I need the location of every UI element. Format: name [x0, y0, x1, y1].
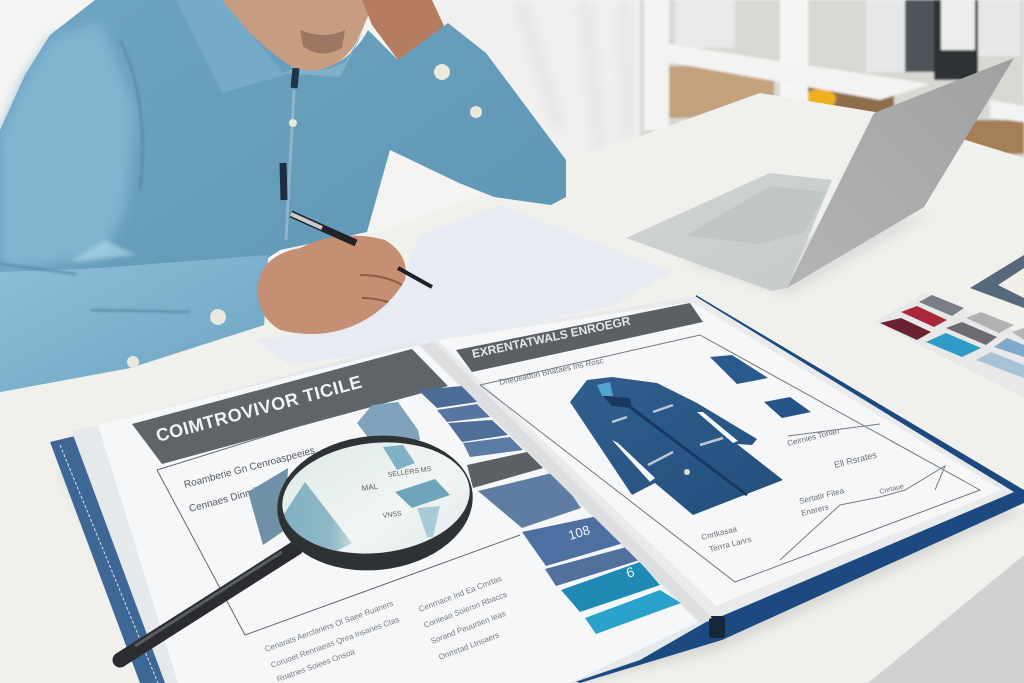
shirt body [0, 0, 566, 392]
laptop shadow [680, 212, 935, 295]
left page heading band [132, 349, 448, 464]
book clip at spine [709, 616, 725, 638]
face and neck [222, 0, 375, 72]
left page heading band: COIMTROVIVOR TICILE [154, 372, 364, 446]
right page annotations: Cnrtaue [879, 483, 905, 496]
book shadow [60, 370, 1024, 683]
right page annotations: Cnrtkasaa [700, 524, 738, 542]
magnifying glass [120, 426, 479, 660]
loose paper on desk [255, 205, 672, 365]
hand at head [362, 0, 445, 60]
sub-heading text [183, 445, 316, 515]
pen [291, 214, 432, 287]
left page body text: Coruoet Rennaeas Qrea Insanes Ctas [270, 615, 401, 670]
left page [72, 340, 706, 683]
corner of second laptop [868, 555, 1024, 683]
left page colour bars: 6 [624, 563, 637, 581]
open spec book [50, 295, 1024, 683]
right page annotations: Terrra Lanrs [708, 535, 752, 554]
blue book cover [50, 295, 1024, 683]
left page garment thumbnails [248, 402, 420, 545]
colour swatch card [875, 255, 1024, 398]
right page heading band: EXRENTATWALS ENROEGR [471, 314, 632, 361]
left page body text [264, 574, 508, 683]
shoulder and upper arm highlight [0, 22, 135, 270]
lens glass [277, 433, 475, 563]
magnified content: SELLERS MS [387, 466, 432, 479]
left page body text: Sorand Peuurtien Ieas [429, 609, 507, 646]
man in denim shirt [0, 0, 566, 392]
small garment swatches [710, 355, 768, 384]
shirt buttons [127, 64, 482, 368]
left page body text: Onmrtad Ltnsaers [437, 631, 500, 662]
magnified content [280, 445, 450, 558]
handle [120, 548, 296, 660]
denim jacket illustration [570, 377, 783, 515]
right page annotations: Dneueatfon Bnataes Ins Rosc [499, 356, 604, 387]
right page annotations: Sertatir Fitea [798, 486, 845, 506]
shelving unit [640, 0, 1024, 160]
sub-heading text: Roamberie Gn Cenroaspeeies [183, 445, 316, 491]
page spine shadow [420, 342, 712, 622]
right page annotations: Ell Rsrates [833, 450, 878, 470]
page frame line [480, 335, 980, 582]
laptop base [626, 173, 832, 291]
sub-heading text: Cennaes Dinmilaanes [188, 479, 285, 515]
sleeve on desk [0, 255, 268, 392]
right page annotations [499, 356, 905, 554]
page frame line [157, 410, 350, 470]
left page body text: Rnatnes Soiees Onsoa [276, 647, 357, 683]
left page colour bars [418, 386, 681, 634]
collar [176, 0, 285, 93]
right page [430, 296, 1014, 622]
lens rim [271, 426, 479, 580]
right page heading band [456, 303, 703, 372]
left page body text: Cenarats Aerclaners Ol Saee Ruaners [264, 599, 395, 654]
photo card corner [970, 255, 1024, 308]
right page annotations: Enarers [800, 502, 830, 518]
shirt seams [0, 40, 190, 312]
writing hand and pen [258, 214, 432, 334]
left page body text: Conteao Soiersn Rbaccs [422, 590, 508, 630]
left page body text: Cenrnace Ind Ea Cmrtas [417, 574, 503, 614]
laptop lid [787, 58, 1014, 288]
magnified content: VNSS [382, 510, 402, 520]
left page colour bars: 108 [566, 522, 592, 543]
right page annotations: Ceirnies Torlan [786, 426, 840, 448]
laptop [626, 58, 1014, 295]
magnified content: MAL [361, 482, 379, 493]
